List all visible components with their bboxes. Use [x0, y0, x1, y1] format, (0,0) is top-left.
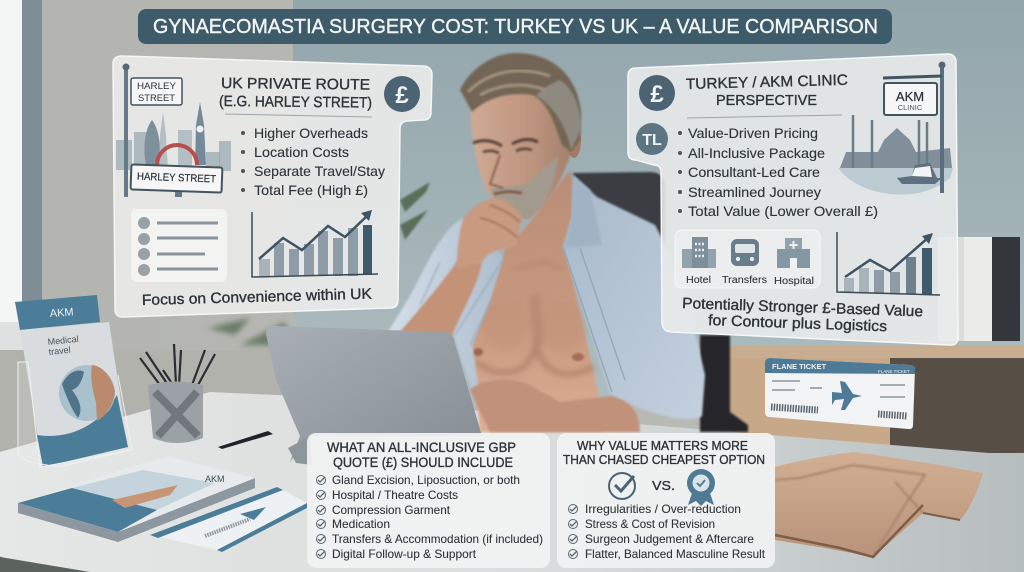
icon: quality badge: [687, 469, 715, 506]
panel heading: [327, 440, 516, 470]
panel heading: [686, 72, 848, 109]
Turkey bullet list: Consultant-Led Care: [688, 164, 820, 180]
plane ticket: shelf: FLANE TICKET: [878, 369, 910, 374]
logistics icons: Hospital: [774, 276, 814, 287]
UK bullet list: Higher Overheads: [254, 125, 368, 141]
brochure holder: Medical: [47, 334, 79, 347]
panel: Turkey / AKM Clinic: [628, 54, 958, 345]
office chair: [573, 172, 748, 432]
shirt fold lines: [420, 260, 503, 345]
icon: hospital: [777, 238, 810, 268]
panel heading: UK PRIVATE ROUTE: [221, 75, 370, 94]
icon: check circle: [609, 473, 635, 499]
panel heading: THAN CHASED CHEAPEST OPTION: [563, 452, 765, 467]
checklist text: [332, 473, 543, 561]
hair: [460, 53, 581, 152]
Turkey bullet list: Total Value (Lower Overall £): [688, 203, 878, 219]
panel heading: PERSPECTIVE: [716, 92, 817, 109]
icon: pound: £: [650, 81, 664, 108]
checklist text: [585, 502, 766, 561]
laptop: [266, 326, 482, 465]
UK caption: Focus on Convenience within UK: [142, 286, 372, 309]
panel heading: (E.G. HARLEY STREET): [219, 93, 372, 112]
globe: [59, 365, 115, 421]
panel heading: TURKEY / AKM CLINIC: [686, 72, 848, 93]
icon: pound: £: [395, 82, 409, 109]
Turkey bullet list: [678, 125, 878, 219]
panel heading: [563, 438, 765, 467]
chest shading: [476, 262, 594, 374]
Turkey caption: for Contour plus Logistics: [708, 312, 887, 335]
brochure stack: [18, 457, 255, 542]
Harley Street signpost and skyline: HARLEY: [137, 81, 176, 91]
Harley Street signpost and skyline: HARLEY STREET: [137, 171, 217, 185]
nipples: [473, 348, 584, 361]
hair highlights: [468, 71, 550, 95]
Turkey caption: Potentially Stronger £-Based Value: [682, 295, 923, 320]
brochure: [15, 295, 100, 330]
Istanbul skyline and AKM sign: AKM: [896, 89, 924, 104]
panel heading: WHAT AN ALL-INCLUSIVE GBP: [327, 440, 516, 455]
title bar: [138, 9, 892, 44]
neck and torso: [472, 170, 605, 432]
plane ticket: shelf: FLANE TICKET: [772, 362, 827, 371]
facial features: [473, 139, 538, 194]
shirt collar: [565, 175, 602, 248]
checklist text: Flatter, Balanced Masculine Result: [585, 547, 766, 561]
checklist text: Transfers & Accommodation (if included): [332, 532, 543, 546]
UK bullet list: Total Fee (High £): [254, 182, 368, 198]
plane ticket: desk: [150, 487, 307, 552]
checklist text: Gland Excision, Liposuction, or both: [332, 473, 520, 487]
brochure holder: travel: [48, 345, 71, 357]
Turkey bullet list: Streamlined Journey: [688, 184, 821, 200]
checklist text: Surgeon Judgement & Aftercare: [585, 532, 754, 546]
finger lines: [480, 205, 520, 238]
UK bullet list: Separate Travel/Stay: [254, 163, 385, 179]
grey side hair: [536, 80, 581, 150]
Turkey caption: [682, 295, 923, 335]
title bar: GYNAECOMASTIA SURGERY COST: TURKEY VS UK – A VALUE COMPARISON: [153, 16, 878, 38]
checklist text: Medication: [332, 517, 390, 531]
logistics icons: Transfers: [722, 275, 767, 286]
panel heading: [219, 75, 372, 112]
checklist text: Hospital / Theatre Costs: [332, 488, 458, 502]
left forearm: [398, 262, 482, 336]
logistics icons: Hotel: [686, 275, 711, 286]
brochure holder: [15, 295, 132, 467]
icon: hotel: [682, 237, 716, 268]
lower forearm and hand: [470, 380, 640, 432]
man: [388, 53, 705, 432]
brochure holder: AKM: [49, 306, 74, 320]
plane icon: [832, 381, 862, 410]
icon: lira: [636, 123, 668, 155]
numbered checklist: [131, 209, 227, 282]
panel: all-inclusive quote: [307, 433, 550, 568]
head: [470, 78, 574, 219]
panel: why value matters: [557, 433, 775, 568]
desk front edge: [0, 557, 90, 572]
checklist icons: [316, 476, 326, 558]
shirt placket: [563, 247, 625, 392]
shirt: right side: [563, 175, 705, 419]
brochure stack: AKM: [205, 474, 225, 484]
Turkey bullet list: All-Inclusive Package: [688, 145, 825, 161]
checklist text: Irregularities / Over-reduction: [585, 502, 741, 516]
icon: pound: [639, 75, 675, 111]
compression garment: [775, 452, 983, 557]
Harley Street signpost and skyline: [116, 64, 231, 197]
shirt: left sleeve and front: [388, 218, 503, 398]
rising bar chart: [252, 210, 378, 277]
icon: lira: TL: [642, 132, 662, 149]
hand at chin: [456, 199, 522, 270]
desk: [0, 392, 1024, 572]
pen: [218, 431, 273, 449]
checklist icons: [568, 504, 578, 558]
checklist text: Stress & Cost of Revision: [585, 517, 715, 531]
panel: UK private route: [113, 56, 432, 317]
checklist text: Digital Follow-up & Support: [332, 547, 477, 561]
ear: [567, 122, 581, 158]
panel heading: WHY VALUE MATTERS MORE: [577, 438, 748, 453]
Istanbul skyline and AKM sign: CLINIC: [898, 103, 923, 112]
UK bullet list: Location Costs: [254, 144, 349, 160]
panel heading: QUOTE (£) SHOULD INCLUDE: [333, 455, 513, 470]
Harley Street signpost and skyline: STREET: [138, 93, 176, 103]
icon: pound: [384, 76, 420, 112]
versus label: VS.: [652, 478, 675, 493]
Turkey bullet list: Value-Driven Pricing: [688, 125, 818, 141]
logistics icons: [675, 230, 820, 288]
Istanbul skyline and AKM sign: [838, 62, 953, 195]
UK bullet list: [241, 125, 385, 198]
checklist text: Compression Garment: [332, 503, 451, 517]
icon: transfer bus: [731, 239, 759, 266]
rising bar chart: [837, 232, 940, 295]
pencil holder: [140, 344, 215, 443]
beard: [490, 156, 558, 219]
plane ticket: shelf: [765, 358, 915, 429]
